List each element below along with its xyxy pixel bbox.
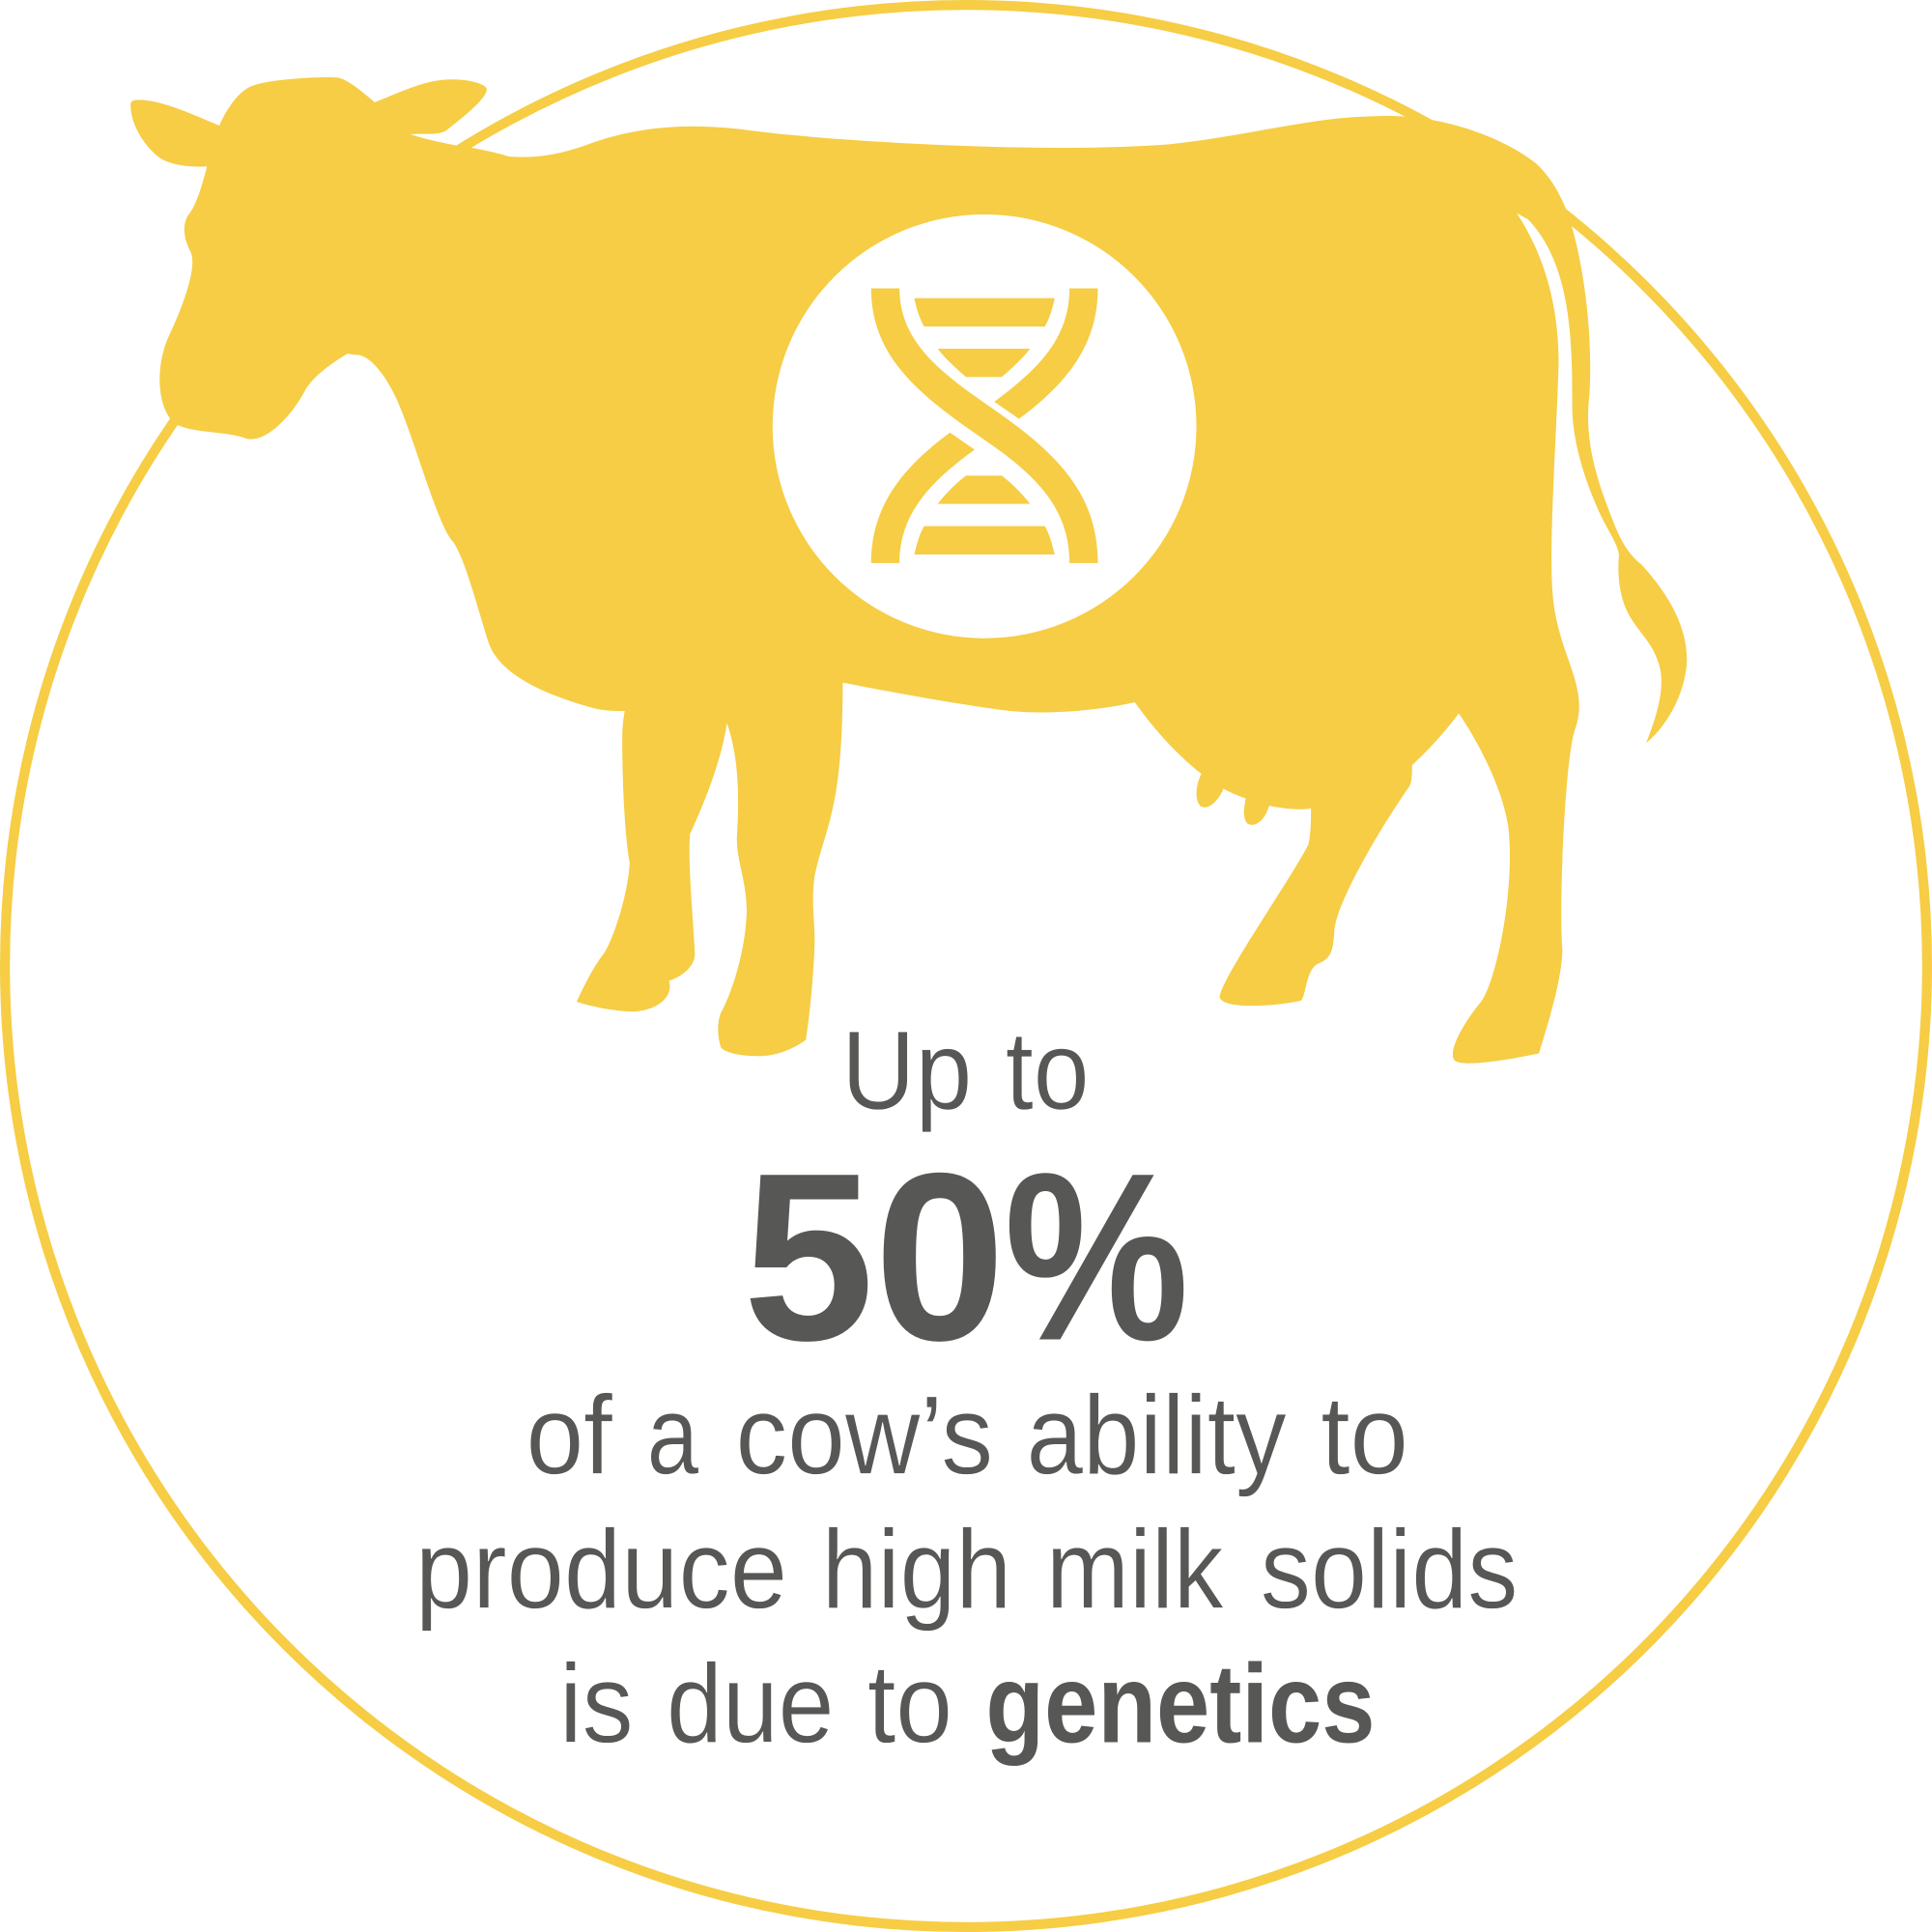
cow silhouette [130, 77, 1687, 1064]
icon: DNA helix [871, 288, 1097, 563]
text: description line 1: of [526, 1373, 613, 1498]
text: description line 3: due [667, 1641, 835, 1767]
text: description line 2: produce [415, 1507, 787, 1633]
text: description line 3 [559, 1641, 952, 1767]
text: genetics: genetics [985, 1641, 1375, 1767]
text: description line 2 [415, 1507, 1518, 1633]
white circle badge [773, 214, 1197, 639]
text: 50%: 50 [743, 1123, 1006, 1390]
text: description line 1: to [1321, 1373, 1408, 1498]
text: description line 2: high [822, 1507, 1011, 1633]
text: description line 2: solids [1261, 1507, 1518, 1633]
text: up to [841, 1008, 1090, 1133]
text: description line 3: to [867, 1641, 952, 1767]
text: description line 1: a [647, 1373, 699, 1498]
text: 50% [743, 1123, 1189, 1390]
text: up to: Up [841, 1008, 972, 1133]
text: description line 1: cow’s [735, 1373, 993, 1498]
text: description line 1: ability [1026, 1373, 1287, 1498]
text: description line 3: is [559, 1641, 634, 1767]
text: 50%: % [1005, 1123, 1189, 1390]
text: up to: to [1006, 1008, 1090, 1133]
text: description line 2: milk [1046, 1507, 1224, 1633]
text: description line 1 [526, 1373, 1408, 1498]
